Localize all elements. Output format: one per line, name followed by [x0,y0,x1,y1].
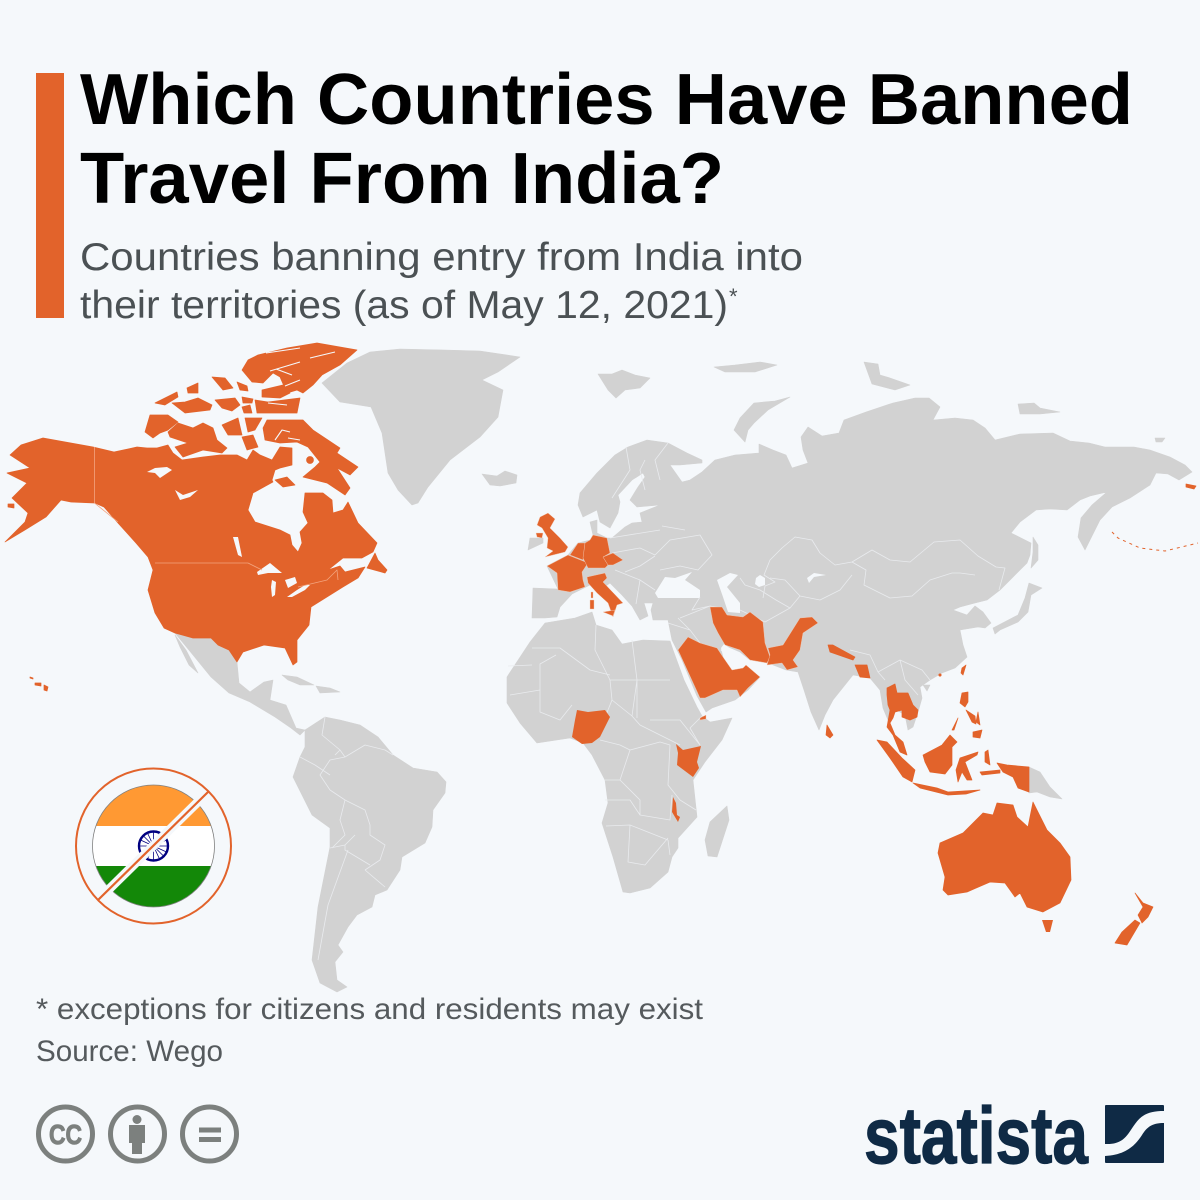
South and Southeast Asia [826,645,1029,795]
world map [5,343,1198,992]
lakes and channels in North America [147,467,310,597]
icon: crossed-out Indian flag [76,768,231,924]
Europe: UK, France, Benelux, Germany, Czechia, Italy [536,513,623,617]
subtitle: * [729,284,738,309]
Kenya [676,744,701,777]
footnote: * exceptions for citizens and residents may exist [36,993,704,1026]
statista logo: statista [864,1091,1088,1180]
Canada and the United States [5,343,1198,691]
icon: creative commons licence: CC [49,1119,82,1150]
icon: creative commons licence [38,1107,236,1161]
Middle East: Iran, Pakistan, Saudi Arabia, Oman, Djibouti [678,607,818,720]
title: Travel From India? [80,139,724,219]
country borders [300,443,1005,960]
New Zealand [1115,893,1153,945]
subtitle [80,236,803,327]
inland seas [655,572,826,672]
title [80,60,1133,219]
Nigeria [572,710,610,744]
Tasmania [1042,920,1053,932]
subtitle: their territories (as of May 12, 2021) [80,284,728,327]
Malawi [672,797,680,822]
land: countries without a ban [175,349,1192,992]
Australia [938,802,1071,912]
source: Source: Wego [36,1035,223,1068]
subtitle: Countries banning entry from India into [80,236,803,279]
accent bar [36,73,64,318]
title: Which Countries Have Banned [80,60,1133,140]
